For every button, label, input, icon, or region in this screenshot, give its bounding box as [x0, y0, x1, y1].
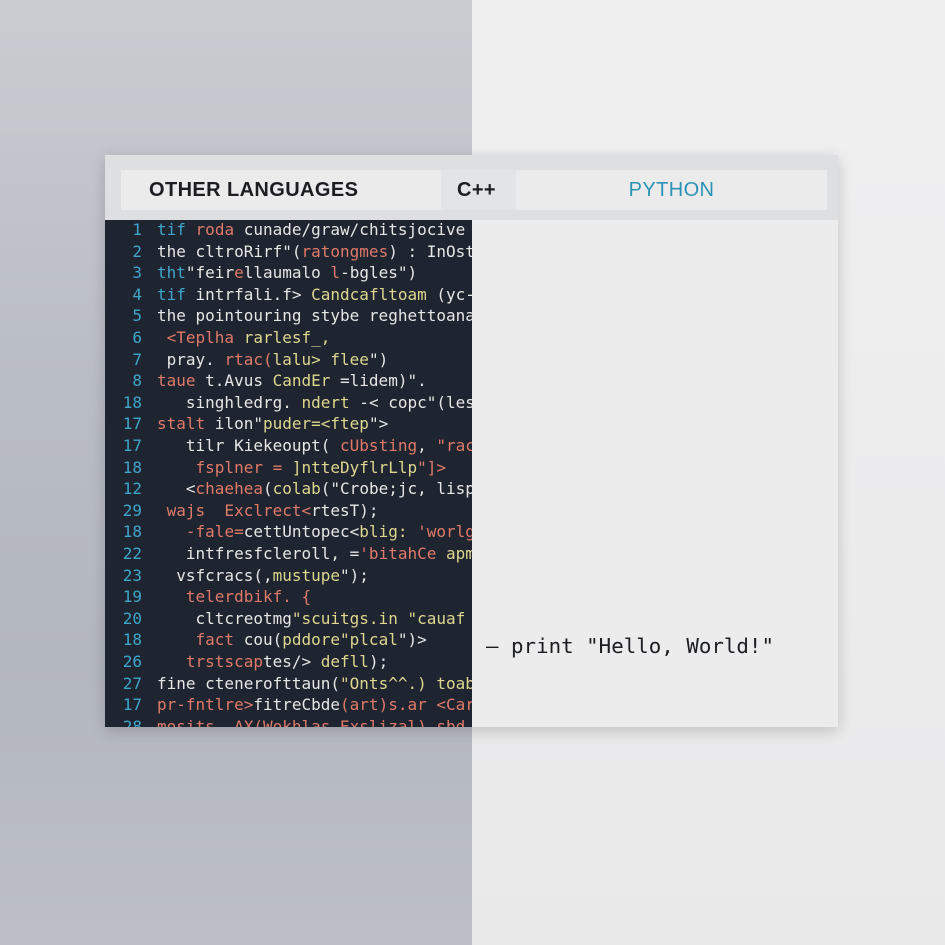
code pane: telerdbikf. { [186, 587, 311, 606]
tab: python: PYTHON [629, 179, 714, 201]
code pane: 8 [132, 371, 142, 390]
code pane: cltcreotmg"scuitgs.in "cauaf [196, 609, 465, 628]
tab: c++: C++ [457, 179, 496, 201]
code pane: fsplner = ]ntteDyflrLlp"]> [196, 458, 446, 477]
code pane: 3 [132, 263, 142, 282]
code pane: 29 [123, 501, 142, 520]
code pane: 20 [123, 609, 142, 628]
panel: code window [105, 155, 838, 727]
code pane: 6 [132, 328, 142, 347]
code pane: 26 [123, 652, 142, 671]
code pane: 19 [123, 587, 142, 606]
code pane: 23 [123, 566, 142, 585]
code pane: <Teplha rarlesf_, [167, 328, 330, 347]
code pane: pray. rtac(lalu> flee") [167, 350, 388, 369]
code pane: tht"feirellaumalo l-bgles") [157, 263, 417, 282]
code pane: stalt ilon"puder=<ftep"> [157, 414, 388, 433]
code pane: wajs Exclrect<rtesT); [167, 501, 379, 520]
code pane: 5 [132, 306, 142, 325]
code pane: 2 [132, 242, 142, 261]
code pane: the pointouring stybe reghettoana [157, 306, 472, 325]
code pane [105, 220, 472, 727]
tab: other languages [121, 170, 441, 210]
code pane: 18 [123, 522, 142, 541]
code pane: 4 [132, 285, 142, 304]
code pane: -fale=cettUntopec<blig: 'worlg [186, 522, 472, 541]
code pane: 17 [123, 414, 142, 433]
code pane: 7 [132, 350, 142, 369]
tab: c++ [441, 170, 516, 210]
code pane: 18 [123, 393, 142, 412]
code pane: 27 [123, 674, 142, 693]
code pane: 17 [123, 436, 142, 455]
tab: other languages: OTHER LANGUAGES [149, 179, 358, 201]
code pane: 18 [123, 458, 142, 477]
code pane: taue t.Avus CandEr =lidem)". [157, 371, 427, 390]
code pane: 12 [123, 479, 142, 498]
code pane: 18 [123, 630, 142, 649]
code pane: fact cou(pddore"plcal")> [196, 630, 427, 649]
code pane: 17 [123, 695, 142, 714]
code pane: 22 [123, 544, 142, 563]
python pane [472, 220, 838, 727]
tab: python [516, 170, 827, 210]
code pane: 1 [132, 220, 142, 239]
code pane: vsfcracs(,mustupe"); [176, 566, 369, 585]
code pane: trstscaptes/> defll); [186, 652, 388, 671]
python code: print hello world: – print "Hello, World!" [486, 634, 774, 658]
